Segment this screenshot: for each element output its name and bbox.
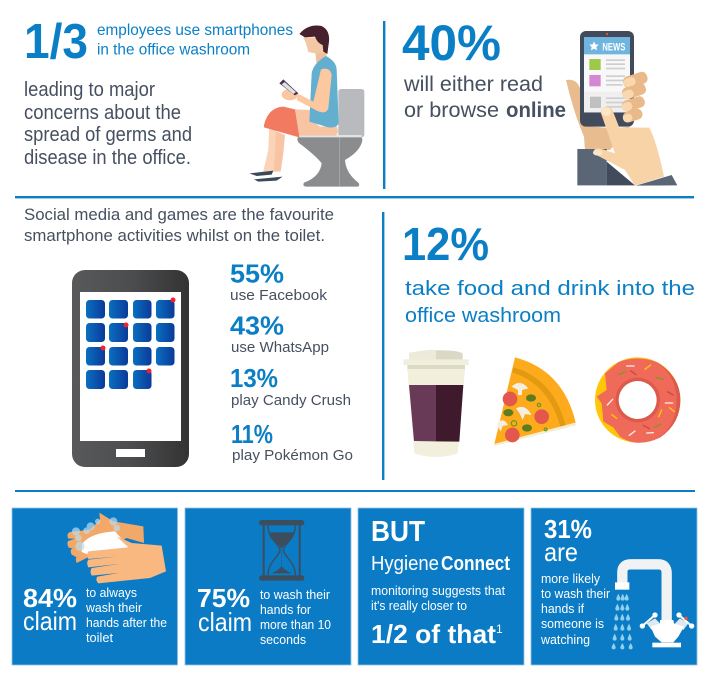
text: monitoring suggests: it's really closer to (371, 598, 467, 613)
stat: 75% claim (197, 583, 252, 637)
text: germs concern (24, 79, 192, 169)
stat: 84% claim: claim (23, 606, 77, 636)
text: germs concern: spread of germs and (24, 124, 192, 146)
panel: HygieneConnect monitoring (358, 508, 524, 665)
text: wash more than 10 seconds: seconds (260, 632, 306, 647)
stat: 1/3: 1/3 (24, 15, 88, 69)
text: monitoring suggests: monitoring suggests that (371, 583, 505, 598)
stat list: activities: 43% (230, 310, 284, 340)
brand: HygieneConnect: Hygiene (371, 553, 439, 575)
brand: HygieneConnect: Connect (441, 553, 510, 575)
text: wash more than 10 seconds: more than 10 (260, 617, 331, 632)
stat list: activities: use Facebook (230, 287, 328, 304)
text: social media intro (24, 206, 334, 245)
text: more likely if watching: watching (540, 632, 590, 647)
panel: 40 percent read online (402, 15, 677, 186)
text: take food and drink (405, 277, 695, 327)
icon: hourglass (259, 520, 304, 581)
icon: washing hands (67, 513, 166, 583)
stat list: activities: 11% (231, 419, 273, 449)
stat: 84% claim (23, 583, 77, 636)
text: more likely if watching: more likely (541, 571, 600, 586)
text: more likely if watching: to wash their (541, 586, 611, 601)
panel: 84% claim (12, 508, 178, 665)
stat: 31% are: 31% (544, 514, 592, 544)
text: always wash hands: toilet (86, 630, 113, 645)
panel: food and drink (402, 218, 695, 457)
icon: hand holding phone with news: NEWS (602, 42, 625, 54)
icon: hand holding phone with news (566, 31, 677, 186)
stat list: activities: 55% (230, 258, 284, 288)
text: always wash hands: wash their (85, 600, 143, 615)
icon: doughnut (595, 357, 680, 443)
stat list: activities (230, 258, 353, 464)
stat: half of that: 1/2 of that (371, 619, 496, 649)
icon: running tap (612, 564, 694, 649)
heading: BUT: BUT (371, 516, 425, 548)
panel: one third of employees (24, 15, 364, 187)
stat: 40%: 40% (402, 15, 501, 71)
text: take food and drink: take food and drink into the (405, 277, 695, 300)
panel: favourite smartphone activities (24, 206, 353, 467)
icon: pizza slice (494, 357, 576, 446)
text: germs concern: concerns about the (24, 102, 181, 124)
text: germs concern: disease in the office. (24, 147, 191, 169)
brand: HygieneConnect (371, 553, 510, 575)
text: germs concern: leading to major (24, 79, 155, 101)
stat: 75% claim: 75% (197, 583, 250, 613)
stat list: activities: use WhatsApp (231, 339, 329, 356)
panel: 75% claim (185, 508, 351, 665)
icon: coffee cup (403, 350, 469, 457)
text: read or browse online (403, 73, 566, 122)
text: take food and drink: office washroom (405, 304, 561, 327)
stat: 12%: 12% (402, 218, 489, 270)
panel: 31% are more likely (531, 508, 697, 665)
text: more likely if watching: someone is (541, 616, 604, 631)
text: social media intro: Social media and games are the favourite (24, 206, 334, 224)
stat: half of that: 1 (496, 622, 503, 636)
text: always wash hands: hands after the (86, 615, 167, 630)
icon: person on toilet (249, 25, 364, 187)
text: employees use smartphones: in the office washroom (97, 42, 250, 58)
stat: 31% are (544, 514, 592, 567)
stat: 84% claim: 84% (23, 583, 77, 613)
stat list: activities: play Pokémon Go (232, 447, 353, 464)
text: always wash hands (85, 585, 167, 645)
text: wash more than 10 seconds: to wash their (260, 587, 331, 602)
text: monitoring suggests (371, 583, 505, 613)
text: wash more than 10 seconds: hands for (260, 602, 312, 617)
text: always wash hands: to always (86, 585, 137, 600)
text: employees use smartphones: employees use smartphones (97, 22, 293, 39)
text: read or browse online: online (506, 99, 566, 122)
text: employees use smartphones (97, 22, 293, 58)
text: read or browse online: will either read (403, 73, 543, 96)
stat: 31% are: are (544, 537, 578, 567)
text: more likely if watching: hands if (541, 601, 584, 616)
text: more likely if watching (540, 571, 611, 647)
text: social media intro: smartphone activities whilst on the toilet. (24, 227, 325, 245)
text: wash more than 10 seconds (260, 587, 331, 647)
icon: smartphone with app grid (72, 270, 189, 467)
stat list: activities: 13% (230, 363, 278, 393)
stat: 75% claim: claim (198, 607, 252, 637)
stat list: activities: play Candy Crush (231, 392, 351, 409)
text: read or browse online: or browse (404, 99, 499, 122)
